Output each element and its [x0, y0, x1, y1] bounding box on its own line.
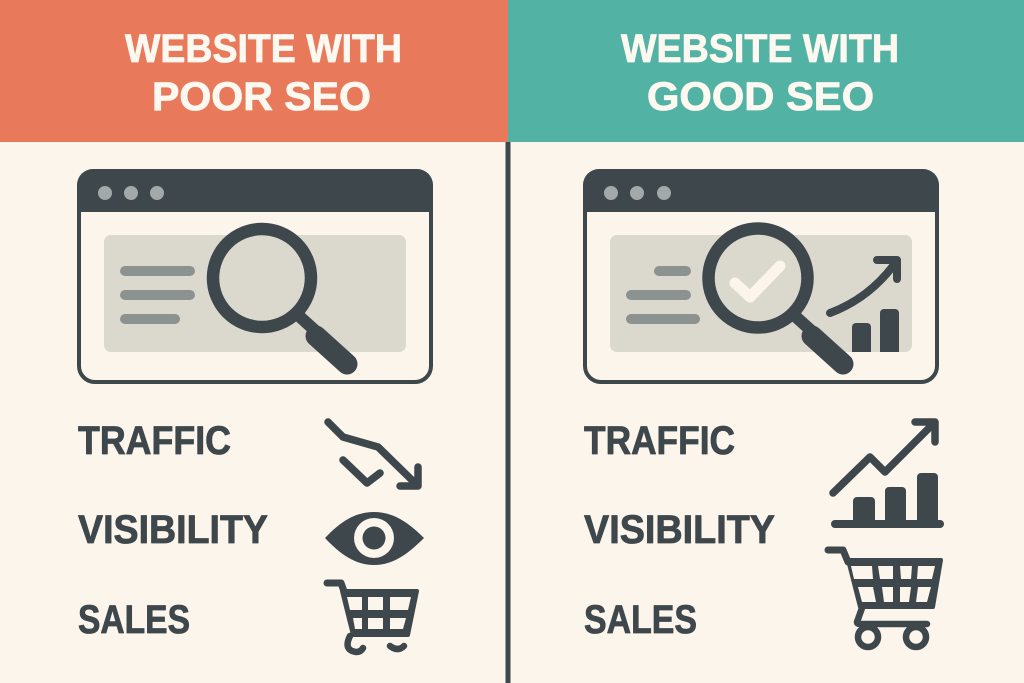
- icon: eye: [325, 512, 424, 565]
- icon: shopping cart small: [327, 583, 417, 652]
- label: sales poor: SALES: [78, 598, 190, 642]
- icon: upward curved arrow: [830, 260, 897, 313]
- label: sales good: SALES: [584, 598, 697, 642]
- heading: website with good seo: [621, 27, 899, 119]
- icon: mini bars: [852, 309, 899, 352]
- browser window: poor SEO: [77, 169, 433, 382]
- heading: website with poor seo: WEBSITE WITH: [125, 27, 402, 71]
- heading: website with good seo: WEBSITE WITH: [621, 27, 899, 71]
- panel: poor SEO header: [0, 0, 508, 142]
- content panel: [104, 235, 406, 352]
- icon: shopping cart large: [828, 550, 941, 647]
- heading: website with poor seo: POOR SEO: [152, 75, 371, 119]
- label: visibility poor: VISIBILITY: [78, 508, 268, 552]
- icon: downward traffic arrow: [328, 422, 418, 486]
- label: visibility good: VISIBILITY: [584, 508, 775, 552]
- label: traffic good: TRAFFIC: [584, 419, 735, 463]
- icon: rising chart: [831, 422, 944, 528]
- label: traffic poor: TRAFFIC: [78, 419, 231, 463]
- window dots: [604, 186, 671, 200]
- icon: magnifying glass: [213, 229, 347, 364]
- panel: good SEO header: [508, 0, 1024, 142]
- text lines: [125, 271, 190, 319]
- browser window: good SEO: [583, 169, 939, 382]
- window dots: [98, 186, 164, 200]
- icon: magnifying glass with check: [708, 228, 843, 364]
- heading: website with poor seo: [125, 27, 402, 119]
- content panel: [610, 235, 912, 352]
- heading: website with good seo: GOOD SEO: [647, 75, 874, 119]
- text lines: [631, 271, 695, 319]
